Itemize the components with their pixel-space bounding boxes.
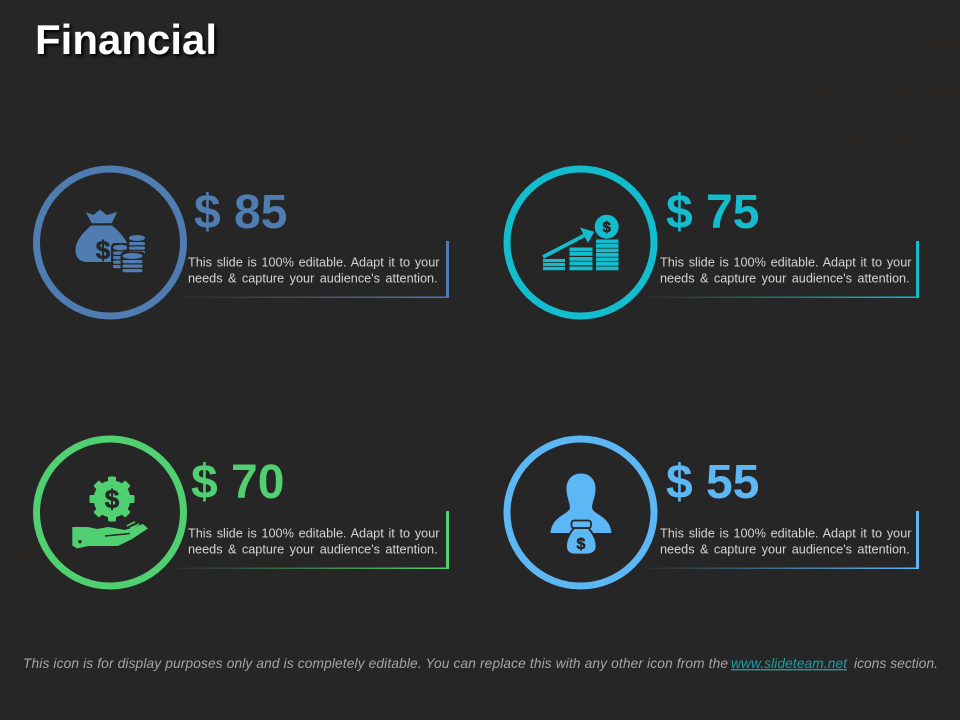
circle ring (36, 169, 184, 316)
value: $ 55 (666, 456, 759, 509)
description (188, 256, 440, 286)
icon: person holding money bag (550, 474, 612, 554)
bracket (635, 511, 919, 569)
description (660, 256, 912, 286)
description: This slide is 100% editable. Adapt it to your (660, 256, 912, 270)
icon: money bag with coins (76, 210, 147, 276)
icon: rising coin stacks with arrow: $ (603, 219, 612, 236)
description: needs & capture your audience's attention. (188, 272, 438, 286)
icon: hand holding dollar gear: $ (105, 484, 120, 514)
description: This slide is 100% editable. Adapt it to your (188, 526, 440, 540)
panel: $ 70 (36, 439, 449, 586)
panel: $ 55 (507, 439, 919, 586)
icon: rising coin stacks with arrow (543, 215, 619, 270)
description: needs & capture your audience's attention. (660, 272, 910, 286)
panel: $ 75 (507, 169, 919, 316)
circle ring (507, 169, 654, 316)
description: needs & capture your audience's attention. (188, 542, 438, 556)
value: $ 70 (191, 456, 284, 509)
bracket (165, 511, 449, 569)
icon: person holding money bag: $ (577, 536, 586, 553)
description (660, 526, 912, 556)
icon: money bag with coins: $ (96, 235, 111, 265)
footer note: icons section. (854, 656, 938, 671)
circle ring (507, 439, 654, 586)
description: This slide is 100% editable. Adapt it to your (188, 256, 440, 270)
circle ring (36, 439, 184, 586)
description: This slide is 100% editable. Adapt it to your (660, 526, 912, 540)
value: $ 85 (194, 186, 287, 239)
panel: $ 85 (36, 169, 449, 316)
description: needs & capture your audience's attention. (660, 542, 910, 556)
value: $ 75 (666, 186, 759, 239)
footer note: This icon is for display purposes only and is completely editable. You can replace this with any other icon from the (23, 656, 728, 671)
footer note: www.slideteam.net (731, 656, 848, 671)
bracket (165, 241, 449, 298)
description (188, 526, 440, 556)
icon: hand holding dollar gear (72, 476, 148, 548)
bracket (635, 241, 919, 298)
title: Financial (35, 16, 217, 63)
